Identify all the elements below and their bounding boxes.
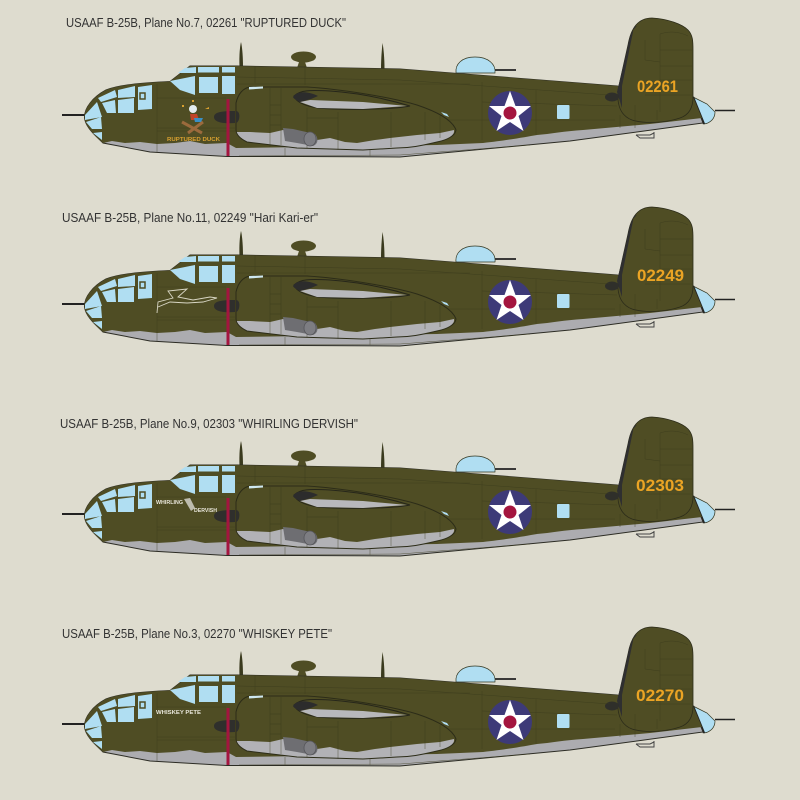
nose art: Whiskey Pete: WHISKEY PETE: [156, 710, 202, 716]
aircraft profile: Hari Kari-er: [62, 207, 735, 346]
aircraft profile: Ruptured Duck: [62, 18, 735, 157]
tail number: 02270: [636, 686, 684, 705]
nose art: duck: RUPTURED DUCK: [167, 137, 220, 143]
aircraft profile: Whirling Dervish: [62, 417, 735, 556]
aircraft profile: Whiskey Pete: [62, 627, 735, 766]
nose art: Whirling Dervish: DERVISH: [194, 508, 217, 514]
heading: Whirling Dervish: USAAF B-25B, Plane No.9, 02303 "WHIRLING DERVISH": [60, 417, 358, 431]
tail number: 02303: [636, 476, 684, 495]
tail number: 02261: [637, 77, 678, 96]
heading: Hari Kari-er: USAAF B-25B, Plane No.11, 02249 "Hari Kari-er": [62, 211, 318, 225]
nose art: Whirling Dervish: [156, 498, 217, 514]
nose art: Whirling Dervish: WHIRLING: [156, 500, 183, 506]
nose art: duck: [167, 100, 220, 143]
tail number: 02249: [637, 266, 684, 285]
nose art: flying figure outline: [157, 289, 217, 313]
heading: Whiskey Pete: USAAF B-25B, Plane No.3, 02270 "WHISKEY PETE": [62, 627, 332, 641]
heading: Ruptured Duck: USAAF B-25B, Plane No.7, 02261 "RUPTURED DUCK": [66, 16, 346, 30]
